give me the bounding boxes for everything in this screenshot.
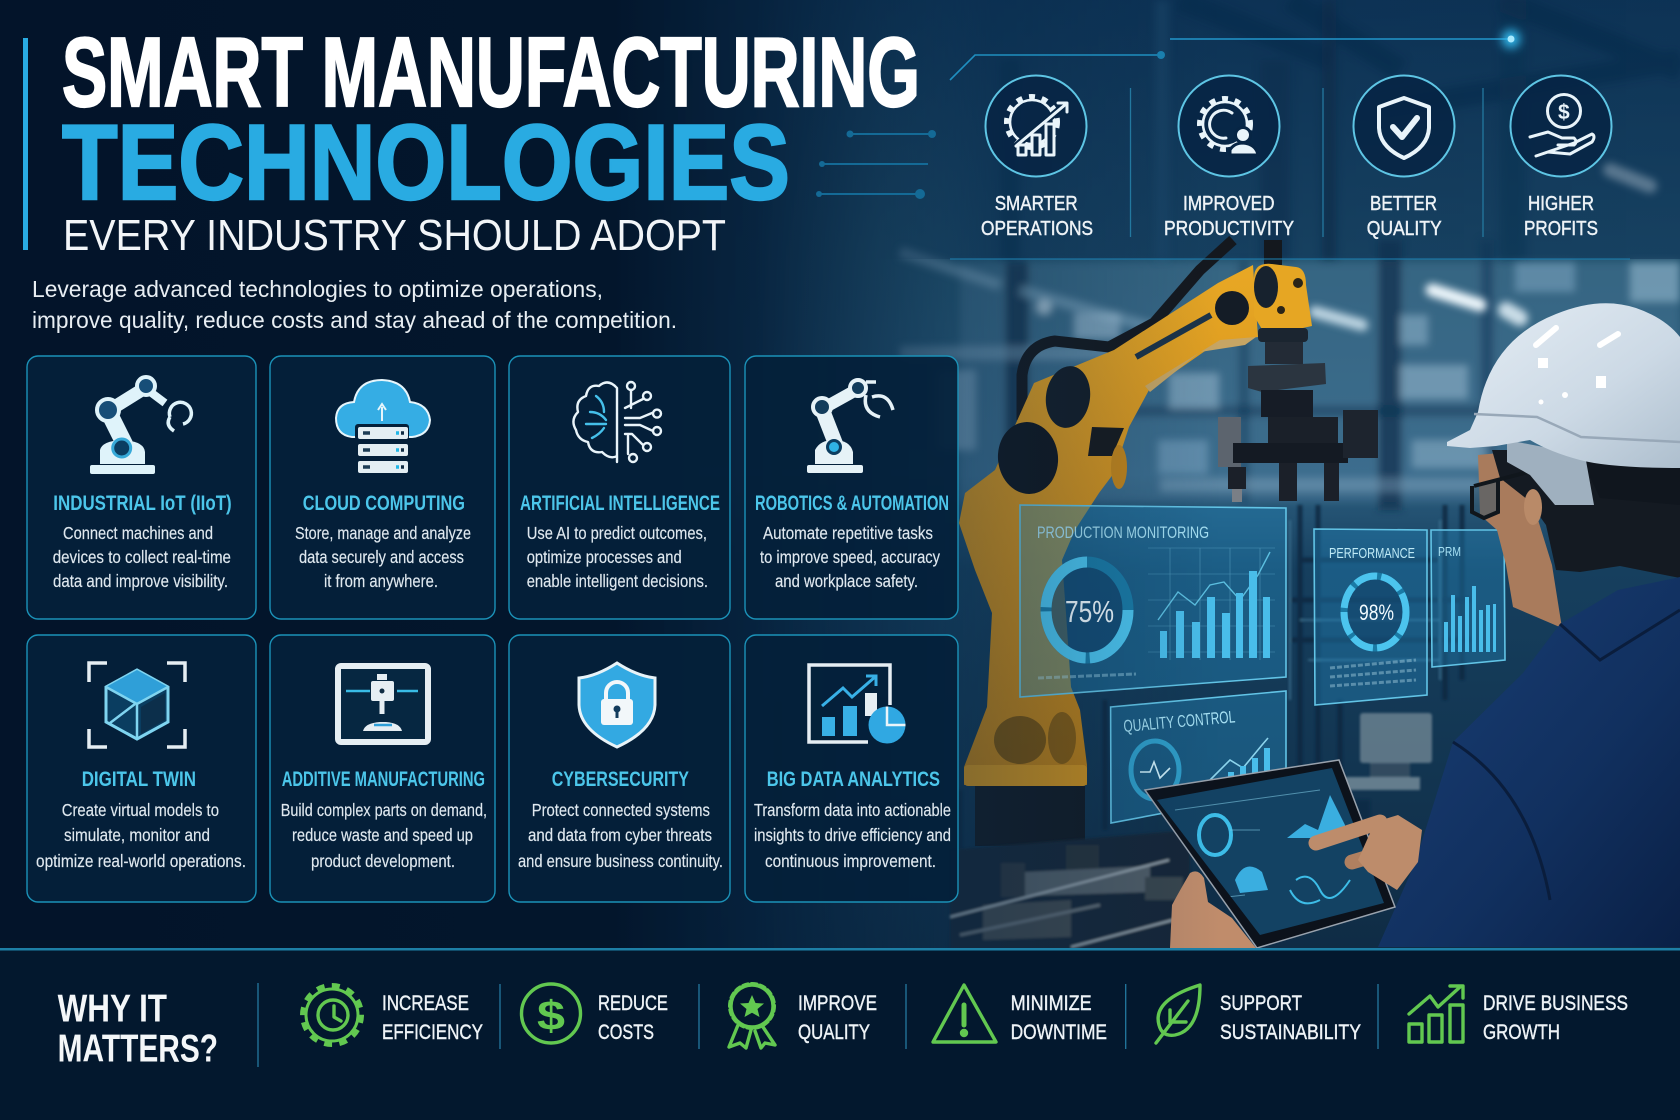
panel: big data analytics: insights to drive efficiency and <box>754 825 951 845</box>
panel: additive manufacturing <box>270 635 495 902</box>
icon: shield and padlock <box>579 663 655 747</box>
underside of forearm <box>1145 337 1256 392</box>
panel: robotics and automation: and workplace safety. <box>775 571 918 591</box>
hologram: quality control <box>1111 691 1286 823</box>
icon: warning triangle <box>933 985 996 1042</box>
donut 98%: 98% <box>1359 600 1394 625</box>
helmet strap <box>1582 460 1680 505</box>
item: support sustainability <box>1156 985 1361 1044</box>
base stains <box>994 716 1046 764</box>
item: reduce costs <box>522 984 668 1044</box>
hologram: production monitoring <box>1020 505 1286 697</box>
panel: artificial intelligence: enable intelligent decisions. <box>527 571 708 591</box>
benefit: better quality: BETTER <box>1370 192 1437 215</box>
panel: big data analytics: continuous improvement. <box>765 851 936 871</box>
icon: gear with person <box>1200 98 1258 155</box>
panel: cybersecurity: and ensure business continuity. <box>518 851 723 871</box>
benefit: better quality: QUALITY <box>1367 217 1442 240</box>
panel: additive manufacturing: product development. <box>311 851 455 871</box>
hologram: quality control: QUALITY CONTROL <box>1123 707 1236 736</box>
benefit: better quality <box>1354 76 1454 240</box>
icon: dollar coin: $ <box>537 992 565 1039</box>
item: improve quality: IMPROVE <box>798 992 877 1015</box>
title accent bar <box>23 38 28 250</box>
item: improve quality <box>729 984 877 1048</box>
item: drive business growth <box>1409 986 1628 1044</box>
icon: hand holding coin: $ <box>1558 101 1570 124</box>
panel: additive manufacturing: ADDITIVE MANUFACTURING <box>282 767 485 791</box>
icon: leaf <box>1156 985 1200 1043</box>
shoulder disc <box>1042 363 1094 431</box>
panel: cloud computing: data securely and access <box>299 547 464 567</box>
panel: big data analytics: Transform data into actionable <box>754 800 951 820</box>
hologram: side chart <box>1431 530 1505 667</box>
panel: artificial intelligence: Use AI to predict outcomes, <box>527 523 707 543</box>
panel: industrial iot: devices to collect real-time <box>53 547 231 567</box>
icon: gear clock <box>302 986 362 1044</box>
donut 98% <box>1344 576 1406 648</box>
machinery on the lower left <box>950 830 1190 950</box>
benefit: higher profits: PROFITS <box>1524 217 1598 240</box>
helmet suspension <box>1507 440 1594 505</box>
panel: industrial iot: INDUSTRIAL IoT (IIoT) <box>53 491 232 515</box>
item: increase efficiency: INCREASE <box>382 992 469 1015</box>
dark box <box>1088 427 1124 456</box>
heading: why it matters: WHY IT <box>58 988 167 1030</box>
panel: cloud computing: it from anywhere. <box>324 571 438 591</box>
circuit lines <box>816 30 1520 199</box>
benefit: higher profits: HIGHER <box>1528 192 1594 215</box>
panel: artificial intelligence: ARTIFICIAL INTELLIGENCE <box>520 491 720 515</box>
panel: cloud computing <box>270 356 495 619</box>
benefit: smarter operations: OPERATIONS <box>981 217 1093 240</box>
icon: ribbon <box>729 984 775 1048</box>
hologram: performance <box>1314 529 1427 705</box>
item: minimize downtime <box>933 985 1107 1044</box>
item: improve quality: QUALITY <box>798 1021 870 1044</box>
panel: cybersecurity: Protect connected systems <box>532 800 710 820</box>
wrist <box>1258 328 1308 342</box>
base ring <box>964 765 1087 786</box>
icon: growth chart <box>1409 986 1463 1042</box>
panel: cloud computing: CLOUD COMPUTING <box>303 491 465 515</box>
gripper <box>1268 417 1338 447</box>
heading: why it matters <box>58 988 218 1070</box>
icon: cloud and servers <box>336 380 430 473</box>
intro text: Leverage advanced technologies to optimize operations, <box>32 276 603 302</box>
item: support sustainability: SUPPORT <box>1220 992 1302 1015</box>
icon: dollar coin <box>522 984 580 1043</box>
bar chart <box>1148 548 1275 660</box>
helmet <box>1447 303 1680 468</box>
left dark fade <box>0 0 1220 950</box>
panel: robotics and automation: to improve speed, accuracy <box>760 547 940 567</box>
panel: additive manufacturing: reduce waste and speed up <box>292 825 473 845</box>
panel: digital twin: DIGITAL TWIN <box>82 767 196 791</box>
intro text <box>32 276 677 333</box>
icon: hand holding coin <box>1530 94 1594 156</box>
panel: cybersecurity: and data from cyber threats <box>528 825 712 845</box>
head block <box>1254 264 1312 336</box>
top benefits band tint <box>880 0 1680 259</box>
item: increase efficiency: EFFICIENCY <box>382 1021 483 1044</box>
item: minimize downtime: MINIMIZE <box>1011 992 1092 1015</box>
panel: industrial iot: Connect machines and <box>63 523 213 543</box>
panel: big data analytics: BIG DATA ANALYTICS <box>767 767 940 791</box>
panel: cybersecurity <box>509 635 730 902</box>
hologram: performance: PERFORMANCE <box>1329 545 1415 562</box>
title block: EVERY INDUSTRY SHOULD ADOPT <box>63 212 726 260</box>
panel: big data analytics <box>745 635 958 902</box>
item: reduce costs: COSTS <box>598 1021 654 1044</box>
panel: artificial intelligence: optimize processes and <box>527 547 682 567</box>
panel: robotics and automation <box>745 356 958 619</box>
benefit: higher profits <box>1510 76 1612 240</box>
intro text: improve quality, reduce costs and stay ahead of the competition. <box>32 307 677 333</box>
hands <box>1170 815 1422 948</box>
heading: why it matters: MATTERS? <box>58 1028 218 1070</box>
shirt <box>1378 577 1680 947</box>
donut 75%: 75% <box>1065 594 1114 629</box>
title block: SMART MANUFACTURING <box>62 17 920 127</box>
hologram: side chart: PRM <box>1438 544 1461 559</box>
panel: industrial iot: data and improve visibility. <box>53 571 228 591</box>
icon: cube in brackets <box>89 663 185 747</box>
icon: robot arm <box>90 377 191 474</box>
panel: digital twin <box>27 635 256 902</box>
benefit: improved productivity <box>1164 76 1294 240</box>
worker <box>1378 303 1680 947</box>
lower disc <box>994 419 1062 497</box>
robot arm <box>959 240 1378 846</box>
title block: TECHNOLOGIES <box>62 102 790 222</box>
panel: why it matters band <box>0 948 1680 1120</box>
icon: brain with circuits <box>573 382 661 462</box>
item: support sustainability: SUSTAINABILITY <box>1220 1021 1361 1044</box>
benefit: improved productivity: IMPROVED <box>1183 192 1274 215</box>
icon: gear with rising chart <box>1006 96 1067 155</box>
glasses <box>1472 472 1528 518</box>
panel: artificial intelligence <box>509 356 730 619</box>
cables <box>1022 240 1233 420</box>
head skin <box>1478 450 1562 628</box>
panel: additive manufacturing: Build complex parts on demand, <box>281 800 487 820</box>
ear <box>1524 489 1542 525</box>
benefit: smarter operations <box>981 76 1093 240</box>
title block <box>62 17 920 260</box>
hair <box>1492 450 1680 578</box>
donut 75% <box>1046 562 1128 658</box>
panel: robotics and automation: Automate repetitive tasks <box>763 523 933 543</box>
panel: industrial iot <box>27 356 256 619</box>
item: increase efficiency <box>302 986 483 1044</box>
panel: digital twin: optimize real-world operations. <box>36 851 246 871</box>
tablet <box>1145 760 1395 948</box>
icon: 3d printer <box>338 666 428 742</box>
panel: cloud computing: Store, manage and analyze <box>295 523 471 543</box>
panel heading: PRODUCTION MONITORING <box>1037 523 1209 542</box>
item: minimize downtime: DOWNTIME <box>1011 1021 1107 1044</box>
slot <box>1136 315 1211 357</box>
panel: cybersecurity: CYBERSECURITY <box>552 767 689 791</box>
arm body <box>959 265 1258 785</box>
elbow disc <box>1215 291 1249 325</box>
panel: digital twin: simulate, monitor and <box>64 825 210 845</box>
benefits row <box>981 76 1612 240</box>
item: drive business growth: DRIVE BUSINESS <box>1483 992 1628 1015</box>
benefit: improved productivity: PRODUCTIVITY <box>1164 217 1294 240</box>
icon: chart with pie <box>809 665 906 744</box>
panel: digital twin: Create virtual models to <box>62 800 219 820</box>
item: reduce costs: REDUCE <box>598 992 668 1015</box>
panel: robotics and automation: ROBOTICS & AUTOMATION <box>755 491 949 515</box>
icon: robot arm <box>807 380 893 473</box>
item: drive business growth: GROWTH <box>1483 1021 1560 1044</box>
icon: shield check <box>1379 98 1429 158</box>
benefit: smarter operations: SMARTER <box>995 192 1078 215</box>
